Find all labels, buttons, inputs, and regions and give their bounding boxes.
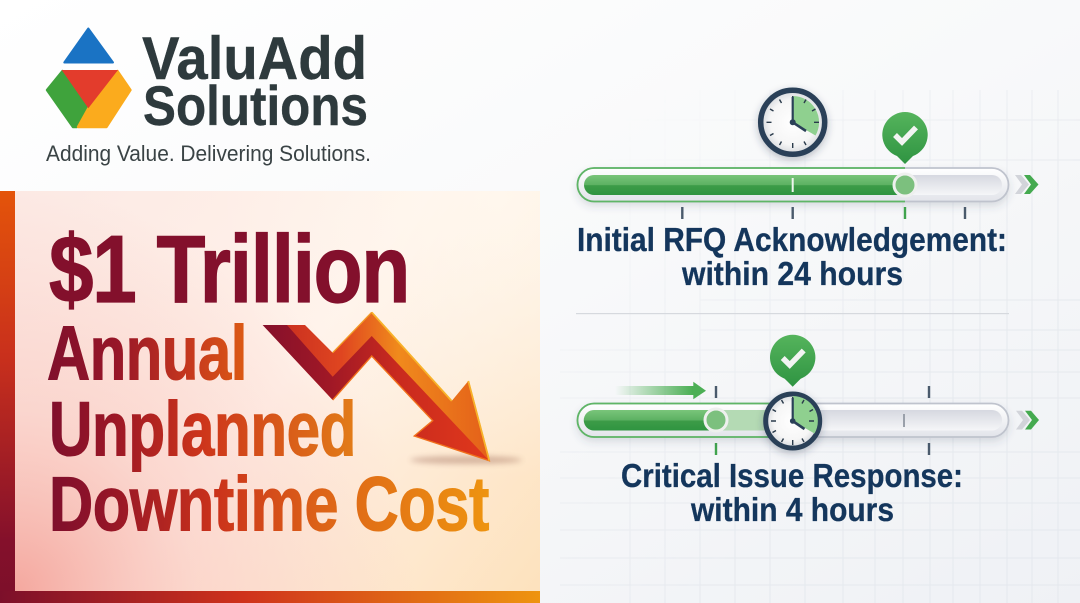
icon: falling arrow	[263, 312, 489, 461]
progress bar	[577, 404, 1008, 437]
logo tagline: Adding Value. Delivering Solutions.	[46, 141, 371, 166]
logo wordmark line 2: Solutions	[143, 74, 368, 137]
bottom accent strip	[0, 591, 540, 603]
panel: downtime cost	[0, 191, 540, 603]
progress bar	[577, 168, 1008, 202]
headline: Unplanned: Unplanned	[49, 386, 356, 472]
icon: logo yellow facet	[78, 71, 130, 127]
icon: logo red facet	[62, 70, 118, 108]
panel: critical issue timeline	[577, 335, 1039, 528]
section divider	[576, 313, 1009, 314]
scale ticks	[682, 207, 965, 219]
arrow shadow	[410, 456, 522, 464]
icon: chevrons	[1015, 175, 1038, 194]
icon: push arrow	[615, 382, 706, 399]
faint grid background	[560, 90, 1080, 603]
logo: ValuAdd Solutions	[46, 25, 371, 166]
panel: RFQ acknowledgement timeline	[577, 90, 1038, 292]
icon: check pin	[882, 112, 928, 164]
headline: Annual: Annual	[47, 310, 247, 396]
icon: logo green facet	[47, 71, 88, 127]
icon: clock	[761, 90, 825, 154]
panel background	[15, 191, 540, 591]
icon: clock	[766, 394, 820, 448]
icon: logo blue triangle	[64, 28, 113, 62]
headline: Downtime Cost: Downtime Cost	[49, 462, 489, 548]
label: Initial RFQ Acknowledgement: Initial RFQ Acknowledgement:	[577, 221, 1007, 258]
icon: chevrons	[1016, 411, 1039, 430]
icon: check pin	[770, 335, 815, 387]
label: Critical Issue Response: Critical Issue Response:	[621, 457, 963, 494]
label: within 4 hours: within 4 hours	[690, 491, 894, 528]
label: within 24 hours: within 24 hours	[681, 255, 903, 292]
left accent strip	[0, 191, 15, 603]
logo wordmark line 1: ValuAdd	[142, 25, 367, 92]
headline: $1 Trillion: $1 Trillion	[49, 216, 409, 323]
scale ticks	[716, 386, 929, 455]
